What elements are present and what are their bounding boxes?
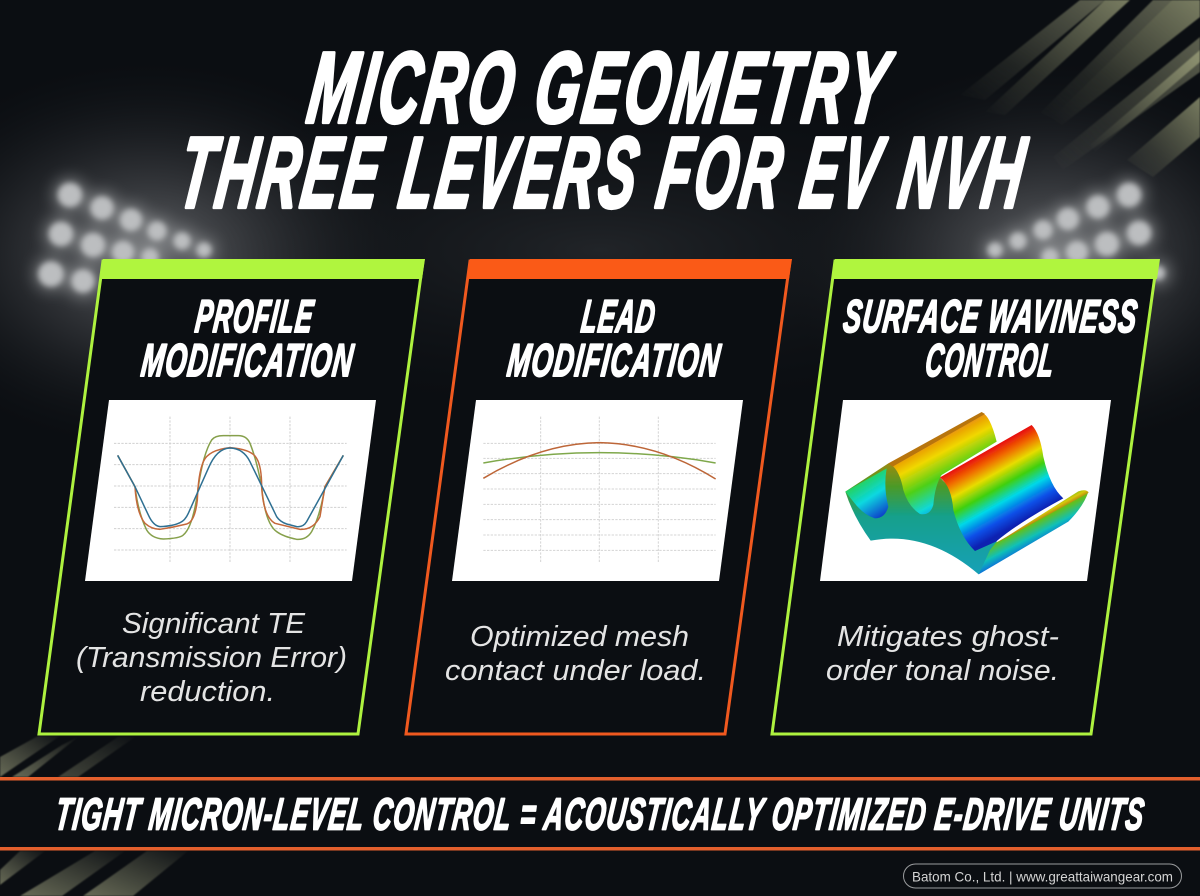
panel: lead modification [406, 259, 792, 734]
stadium lights left [35, 179, 215, 297]
heading: LEAD [579, 290, 659, 342]
description: contact under load. [445, 655, 706, 687]
heading: CONTROL [923, 334, 1058, 386]
card frame [406, 261, 790, 734]
heading [841, 290, 1141, 386]
decorative light streaks bottom left [0, 736, 188, 896]
stadium lights right [984, 179, 1170, 285]
heading: MODIFICATION [139, 334, 357, 386]
heading [505, 290, 724, 386]
panel: surface waviness control [772, 259, 1160, 734]
footer company pill: Batom Co., Ltd. | www.greattaiwangear.com [912, 868, 1173, 884]
description: (Transmission Error) [76, 642, 347, 674]
panel: profile modification [39, 259, 425, 734]
description: Optimized mesh [470, 621, 689, 653]
title [173, 32, 1035, 229]
description: reduction. [140, 676, 275, 708]
card frame [772, 261, 1157, 734]
description [445, 621, 706, 687]
description [76, 608, 347, 708]
heading: MODIFICATION [505, 334, 724, 386]
description [826, 621, 1059, 687]
decorative light streaks top right [960, 0, 1200, 177]
footer company pill [904, 864, 1182, 888]
card top accent bar [467, 259, 792, 279]
card frame [39, 261, 423, 734]
description: Significant TE [122, 608, 306, 640]
conclusion banner [0, 777, 1200, 850]
heading: PROFILE [193, 290, 317, 342]
chart: profile modification curves [85, 400, 376, 581]
card top accent bar [832, 259, 1160, 279]
description: Mitigates ghost- [837, 621, 1059, 653]
chart: lead modification curves [452, 400, 743, 581]
illustration: gear tooth waviness heat map [820, 400, 1111, 581]
description: order tonal noise. [826, 655, 1059, 687]
card top accent bar [100, 259, 425, 279]
heading [139, 290, 357, 386]
